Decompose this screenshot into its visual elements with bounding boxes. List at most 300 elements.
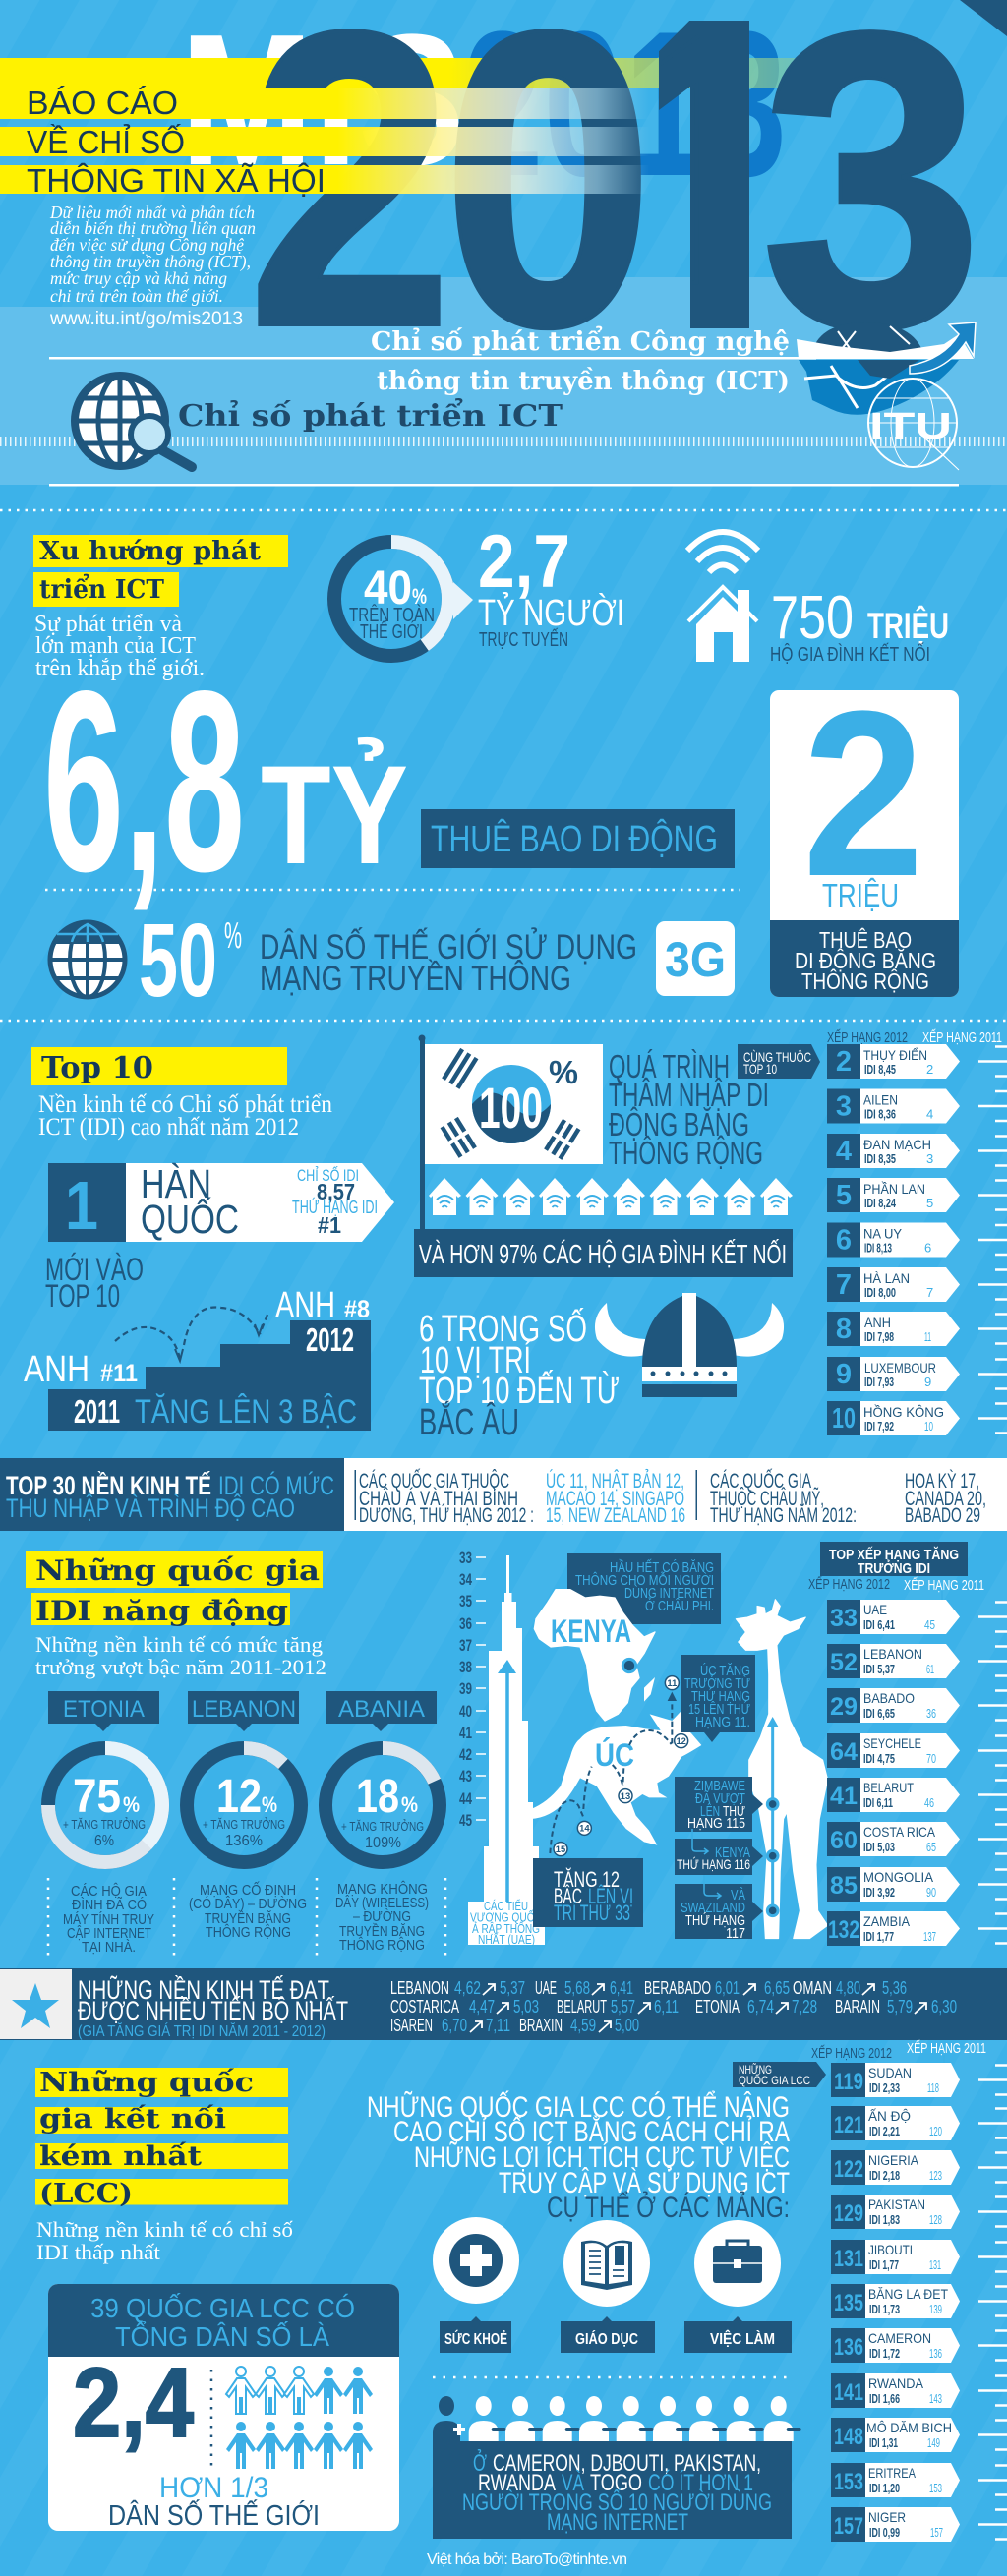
icon: work briefcase: [694, 2220, 781, 2307]
rank row: Mongolia: [827, 1867, 1007, 1902]
heading: least connected countries: kém nhất: [39, 2140, 203, 2172]
main title: [27, 85, 326, 199]
rank card: South Korea: 1: [65, 1167, 98, 1244]
banner: top 30 economies: [0, 1458, 1007, 1531]
callout: bandwidth in Africa: [567, 1553, 721, 1624]
stat: 50 percent: %: [224, 915, 242, 957]
stat: 2.7 billion online: [478, 520, 624, 651]
rank row: Sudan: SUDAN: [868, 2065, 912, 2080]
rank row: India: 120: [929, 2124, 942, 2138]
rank row: Rwanda: RWANDA: [868, 2375, 924, 2391]
rank row: Pakistan: [831, 2195, 1007, 2229]
donut chart: Lebanon 12 percent: + TĂNG TRƯỞNG: [203, 1817, 285, 1832]
table headers: growth ranks: XẾP HẠNG 2012: [808, 1576, 890, 1593]
rank row: Mongolia: IDI 3,92: [863, 1885, 895, 1900]
callout: UAE rise: LÊN VỊ: [588, 1884, 633, 1908]
rank row: Sweden: THỤY ĐIỂN: [863, 1046, 927, 1063]
rank scale 33 to 45: 42: [459, 1745, 472, 1764]
label: jobs: VIỆC LÀM: [710, 2329, 775, 2348]
tag: LCC countries: [733, 2062, 826, 2087]
ICT development subtitle: Chỉ số phát triển Công nghệ: [371, 325, 790, 357]
banner: most improved economies: UAE: [535, 1978, 557, 1998]
rank row: Zambia: ZAMBIA: [863, 1913, 911, 1929]
callout: Swaziland: THỨ HẠNG: [685, 1912, 745, 1929]
rank row: Mozambique: [831, 2418, 1007, 2452]
intro paragraph: đến việc sử dụng Công nghệ: [50, 235, 245, 255]
heading: dynamic IDI countries: Những quốc gia: [35, 1554, 320, 1587]
map: Africa with Kenya: [534, 1590, 655, 1721]
heading: least connected countries: Những quốc: [39, 2067, 254, 2098]
label: UAE: NHẤT (UAE): [478, 1932, 535, 1947]
rank row: Djibouti: 131: [929, 2257, 941, 2272]
callout: Zimbabwe: ZIMBAWE: [694, 1778, 745, 1794]
rank row: Nigeria: NIGERIA: [868, 2152, 919, 2168]
text: LCC benefits: TRUY CẬP VÀ SỬ DỤNG ICT: [499, 2166, 790, 2199]
map: Africa with Kenya: KENYA: [551, 1613, 631, 1649]
rank row: Nigeria: 122: [834, 2156, 863, 2183]
callout: least connected facts: VÀ: [562, 2470, 584, 2496]
rank row: Barbados: [827, 1688, 1007, 1723]
main title: BÁO CÁO: [27, 85, 178, 121]
kangaroo: Australia rank path: 15: [556, 1844, 565, 1854]
rank row: Finland: [827, 1178, 1007, 1212]
banner: top 30 economies: THUỘC CHÂU MỸ,: [710, 1487, 824, 1510]
rank row: UAE: 33: [830, 1605, 858, 1632]
callout: UAE rise: TRÍ THỨ 33: [554, 1901, 630, 1925]
rank row: Lebanon: [827, 1644, 1007, 1678]
text: Estonia description: [63, 1883, 154, 1956]
donut chart: Albania 18 percent: + TĂNG TRƯỞNG: [341, 1819, 424, 1834]
heading: ICT trends: [33, 535, 288, 607]
rank row: United Kingdom: [827, 1312, 1007, 1346]
rank row: Lebanon: LEBANON: [863, 1646, 922, 1662]
flag: South Korea: [419, 1034, 603, 1229]
rank row: Mozambique: MÔ DĂM BICH: [866, 2420, 952, 2435]
text: Estonia description: ĐÌNH ĐÃ CÓ: [72, 1897, 147, 1913]
callout: least connected facts: TOGO: [590, 2470, 642, 2496]
banner: most improved economies: 6,41: [610, 1978, 633, 1998]
rank row: Pakistan: 128: [929, 2212, 942, 2227]
rank row: Norway: IDI 8,13: [864, 1241, 892, 1255]
rank row: Pakistan: PAKISTAN: [868, 2196, 925, 2212]
tag: also in top 10: CÙNG THUỘC: [743, 1049, 811, 1065]
yellow band top: [0, 58, 816, 88]
top 10 paragraph: [38, 1091, 332, 1141]
rank row: Sudan: 118: [927, 2080, 939, 2095]
rank row: Bangladesh: 135: [834, 2290, 863, 2316]
top right dark corner: [960, 0, 1007, 36]
card: 2 million broadband: [770, 662, 959, 997]
rank scale 33 to 45: 39: [459, 1679, 472, 1698]
text: broadband penetration: [609, 1048, 769, 1171]
rank row: Seychelles: IDI 4,75: [863, 1751, 895, 1766]
banner: 97 percent households: [414, 1229, 793, 1277]
text: LCC benefits: NHỮNG QUỐC GIA LCC CÓ THỂ NÂNG: [367, 2090, 790, 2124]
kangaroo: Australia rank path: 11: [667, 1678, 677, 1688]
country tag: Albania: ABANIA: [338, 1696, 425, 1723]
text: Nordic countries: TOP 10 ĐẾN TỪ: [419, 1369, 620, 1412]
callout: UAE rise: BẬC: [554, 1884, 582, 1908]
rank row: Seychelles: 64: [830, 1738, 858, 1766]
table headers: LCC ranks: XẾP HẠNG 2012: [811, 2045, 892, 2062]
stat: 750 million households: [770, 584, 949, 666]
banner: most improved economies: 6,70: [442, 2016, 467, 2035]
heading: ICT trends: triển ICT: [39, 573, 165, 605]
rank scale 33 to 45: 40: [459, 1702, 472, 1721]
rank scale 33 to 45: 33: [459, 1549, 472, 1567]
kangaroo: Australia rank path: [531, 1676, 701, 1856]
website url: www.itu.int/go/mis2013: [49, 309, 243, 329]
rank row: Mongolia: MONGOLIA: [863, 1869, 934, 1885]
top 10 paragraph: Nền kinh tế có Chỉ số phát triển: [38, 1091, 332, 1118]
rank row: Pakistan: IDI 1,83: [869, 2212, 900, 2227]
rank row: Norway: 6: [836, 1225, 852, 1257]
callout: Swaziland: [675, 1875, 763, 1942]
label: UAE: VƯƠNG QUỐC: [470, 1909, 542, 1925]
stairs: UK rank climb: ANH: [275, 1285, 335, 1326]
rank row: Denmark: [827, 1134, 1007, 1168]
rank row: India: [831, 2106, 1007, 2140]
rank row: Djibouti: IDI 1,77: [869, 2257, 899, 2272]
country tag: Estonia: [48, 1691, 159, 1731]
dynamic countries paragraph: [35, 1632, 326, 1679]
stairs: UK rank climb: TĂNG LÊN 3 BẬC: [135, 1393, 357, 1431]
rank card: South Korea: THỨ HẠNG IDI: [292, 1197, 378, 1217]
rank row: UAE: UAE: [863, 1602, 887, 1617]
rank row: India: ẤN ĐỘ: [868, 2108, 911, 2124]
rank row: Mongolia: 85: [830, 1872, 858, 1900]
label: mobile subscriptions: THUÊ BAO DI ĐỘNG: [431, 817, 718, 860]
callout: Australia growth: HẠNG 11.: [695, 1715, 750, 1730]
background word MIS: MIS: [180, 0, 465, 205]
rank row: Ireland: AILEN: [863, 1091, 898, 1107]
text: Estonia description: MÁY TÍNH TRUY: [63, 1911, 154, 1928]
donut chart: Albania 18 percent: 109%: [365, 1835, 401, 1851]
heading: least connected countries: [35, 2067, 288, 2209]
stat: 6.8 billion: 6,8: [43, 637, 245, 925]
section heading: ICT index: Chỉ số phát triển ICT: [178, 397, 563, 434]
icon: health: [433, 2217, 519, 2304]
ICT development subtitle: thông tin truyền thông (ICT): [377, 367, 790, 396]
text: broadband penetration: THÂM NHẬP DI: [609, 1077, 769, 1113]
rank row: Ireland: [827, 1089, 1007, 1123]
banner: top 30 economies: CÁC QUỐC GIA THUỘC: [359, 1469, 509, 1493]
rank row: Luxembourg: LUXEMBOUR: [864, 1360, 936, 1376]
icon: ITU logo: [797, 322, 976, 470]
text: Lebanon description: TRUYỀN BĂNG: [205, 1910, 291, 1927]
donut chart: Lebanon 12 percent: %: [262, 1792, 277, 1817]
donut chart: 40 percent: THẾ GIỚI: [360, 620, 423, 643]
banner: most improved economies: NHỮNG NỀN KINH TẾ ĐẠT: [78, 1974, 329, 2005]
card: LCC population: TỔNG DÂN SỐ LÀ: [115, 2320, 329, 2352]
houses row: [429, 1178, 793, 1215]
yellow fading title bands: [0, 88, 649, 194]
rank scale 33 to 45: 43: [459, 1767, 472, 1786]
kangaroo: Australia rank path: 13: [621, 1791, 630, 1801]
rank row: Barbados: 29: [830, 1693, 858, 1721]
donut chart: Albania 18 percent: %: [401, 1792, 418, 1817]
card: LCC population: DÂN SỐ THẾ GIỚI: [108, 2498, 320, 2532]
banner: most improved economies: BRAXIN: [519, 2016, 563, 2035]
stairs: UK rank climb: 2012: [306, 1321, 354, 1358]
rank row: Belarus: [827, 1778, 1007, 1812]
card: LCC population: 2,4: [73, 2348, 194, 2458]
heading: top IDI growth: TOP XẾP HẠNG TĂNG: [829, 1547, 959, 1563]
rank row: Costa Rica: 65: [926, 1840, 936, 1854]
rank row: Djibouti: JIBOUTI: [868, 2242, 913, 2257]
icon: viking helmet: [595, 1293, 784, 1397]
rank row: Finland: PHẦN LAN: [863, 1181, 925, 1197]
rank scale 33 to 45: 44: [459, 1789, 472, 1808]
dotted dividers: [0, 510, 1007, 1021]
rank scale 33 to 45: 41: [459, 1724, 472, 1742]
text: LCC benefits: [367, 2090, 790, 2224]
rank row: Niger: NIGER: [868, 2509, 906, 2525]
icon: globe: [50, 921, 125, 997]
country tag: Albania: [326, 1691, 437, 1731]
rank row: Finland: 5: [926, 1196, 933, 1210]
stat: 50 percent: 50: [139, 903, 217, 1019]
rank row: Denmark: 4: [836, 1136, 852, 1167]
rank row: Pakistan: 129: [834, 2200, 863, 2227]
giraffe with rank arrow: [736, 1600, 828, 1939]
kangaroo: Australia rank path: 14: [579, 1824, 590, 1834]
rank row: Costa Rica: COSTA RICA: [863, 1824, 936, 1840]
rank row: Rwanda: 143: [929, 2391, 942, 2406]
rank row: Denmark: IDI 8,35: [864, 1151, 896, 1166]
rank row: Niger: [831, 2507, 1007, 2542]
heading: dynamic IDI countries: [26, 1551, 323, 1627]
rank row: Eritrea: ERITREA: [868, 2465, 917, 2481]
text: Albania description: MẠNG KHÔNG: [337, 1881, 428, 1898]
banner: most improved economies: 7,11: [486, 2016, 510, 2035]
rank row: Norway: NA UY: [863, 1225, 903, 1241]
callout: least connected facts: RWANDA: [478, 2470, 556, 2496]
stairs: UK rank climb: [24, 1285, 371, 1431]
rank row: Bangladesh: [831, 2284, 1007, 2318]
banner: most improved economies: 6,65: [764, 1978, 790, 1998]
rank row: Lebanon: 61: [926, 1662, 934, 1676]
rank scale 33 to 45: 34: [459, 1570, 472, 1589]
banner: most improved economies: 6,01: [715, 1978, 740, 1998]
text: new to top 10: [45, 1252, 144, 1314]
rank row: Seychelles: 70: [926, 1751, 936, 1766]
donut chart: Estonia 75 percent: 75: [73, 1771, 121, 1823]
rank row: UAE: 45: [924, 1617, 935, 1632]
callout: least connected facts: MẠNG INTERNET: [547, 2509, 688, 2536]
banner: most improved economies: 4,62: [454, 1978, 481, 1998]
donut chart: Lebanon 12 percent: [187, 1748, 301, 1862]
callout: Swaziland: VÀ: [731, 1887, 745, 1903]
card: LCC population: HƠN 1/3: [159, 2472, 268, 2504]
banner: most improved economies: BERABADO: [644, 1978, 711, 1998]
text: broadband penetration: ĐỘNG BĂNG: [609, 1106, 749, 1142]
rank row: Zambia: 132: [828, 1916, 859, 1944]
rank row: Netherlands: IDI 8,00: [864, 1285, 896, 1300]
rank row: Zambia: [827, 1911, 1007, 1946]
stat: 2.7 billion online: 2,7: [478, 520, 570, 604]
rank row: Nigeria: IDI 2,18: [869, 2168, 900, 2183]
text: Estonia description: CẬP INTERNET: [67, 1925, 151, 1942]
rank row: Finland: IDI 8,24: [864, 1196, 897, 1210]
rank row: Seychelles: [827, 1733, 1007, 1768]
heading: top 10: Top 10: [41, 1051, 153, 1085]
rank row: Mongolia: 90: [926, 1885, 936, 1900]
callout: Swaziland: SWAZILAND: [681, 1900, 745, 1916]
rank row: Cameroon: 136: [834, 2334, 863, 2361]
card: 2 million broadband: 2: [802, 662, 924, 925]
top 10 paragraph: ICT (IDI) cao nhất năm 2012: [38, 1114, 299, 1141]
donut chart: Estonia 75 percent: + TĂNG TRƯỞNG: [63, 1817, 146, 1832]
rank row: Sweden: 2: [836, 1046, 852, 1078]
text: Lebanon description: [189, 1881, 307, 1941]
card: LCC population: [48, 2284, 399, 2532]
rank row: Belarus: BELARUT: [863, 1780, 914, 1795]
rank row: Hong Kong: IDI 7,92: [864, 1419, 894, 1434]
banner: most improved economies: (GIA TĂNG GIÁ TRỊ IDI NĂM 2011 - 2012): [78, 2021, 326, 2040]
rank card: South Korea: [48, 1161, 394, 1244]
heading: least connected countries: (LCC): [39, 2179, 133, 2209]
stairs: UK rank climb: ANH: [24, 1349, 89, 1390]
tag: LCC countries: QUỐC GIA LCC: [739, 2073, 810, 2087]
callout: bandwidth in Africa: Ở CHÂU PHI.: [645, 1597, 714, 1614]
banner: most improved economies: 5,00: [615, 2016, 639, 2035]
banner: most improved economies: BARAIN: [835, 1997, 880, 2017]
rank row: Norway: [827, 1223, 1007, 1257]
rank row: Netherlands: 7: [926, 1285, 933, 1300]
callout: least connected facts: CÓ ÍT HƠN 1: [648, 2470, 753, 2496]
rank row: Netherlands: HÀ LAN: [863, 1270, 910, 1286]
heading: top 10: [31, 1047, 287, 1085]
rank row: Netherlands: 7: [836, 1269, 852, 1301]
rank row: Netherlands: [827, 1267, 1007, 1302]
icon: wifi house: [687, 532, 758, 662]
banner: most improved economies: BELARUT: [557, 1997, 607, 2017]
icon: ITU logo: ITU: [869, 406, 952, 447]
main title: THÔNG TIN XÃ HỘI: [27, 162, 326, 199]
heading: least connected countries: gia kết nối: [39, 2103, 226, 2135]
rank card: South Korea: CHỈ SỐ IDI: [297, 1165, 359, 1185]
rank row: Denmark: 3: [926, 1151, 933, 1166]
donut chart: 40 percent: [334, 542, 473, 656]
rank row: Sudan: IDI 2,33: [869, 2080, 900, 2095]
text: Estonia description: TẠI NHÀ.: [82, 1939, 136, 1956]
text: Lebanon description: MẠNG CỐ ĐỊNH: [200, 1881, 296, 1899]
rank row: Rwanda: 141: [834, 2379, 863, 2406]
rank row: Cameroon: CAMERON: [868, 2330, 931, 2346]
rank row: Sweden: IDI 8,45: [864, 1062, 896, 1077]
rank row: Lebanon: IDI 5,37: [863, 1662, 895, 1676]
rank row: Zambia: IDI 1,77: [863, 1929, 894, 1944]
banner: most improved economies: 5,68: [564, 1978, 590, 1998]
icon: 3G: [656, 921, 735, 996]
tower: UAE skyscraper: [484, 1555, 539, 1942]
stairs: UK rank climb: 2011: [74, 1393, 120, 1430]
LCC paragraph: IDI thấp nhất: [36, 2240, 160, 2264]
rank row: Hong Kong: HỒNG KÔNG: [863, 1403, 944, 1420]
text: LCC benefits: CỤ THỂ Ở CÁC MẢNG:: [547, 2191, 790, 2224]
callout: Australia growth: THỨ HẠNG: [691, 1688, 750, 1705]
rank row: India: 121: [834, 2112, 863, 2138]
label: UAE: CÁC TIỂU: [484, 1899, 528, 1913]
rank card: South Korea: #1: [318, 1212, 341, 1238]
rank row: Mozambique: 149: [927, 2435, 940, 2450]
flag: South Korea: %: [549, 1054, 578, 1090]
rank scale 33 to 45: 45: [459, 1811, 472, 1830]
donut chart: 40 percent: %: [412, 584, 427, 609]
stat: 750 million households: 750: [771, 584, 854, 652]
banner: most improved economies: 5,57: [611, 1997, 635, 2017]
rank row: Mozambique: 148: [834, 2424, 863, 2450]
rank scale 33 to 45: 35: [459, 1592, 472, 1610]
banner: top 30 economies: CÁC QUỐC GIA: [710, 1469, 811, 1493]
text: Estonia description: CÁC HỘ GIA: [71, 1883, 147, 1900]
tag: also in top 10: [738, 1044, 820, 1079]
callout: Zimbabwe: ĐÃ VƯỢT: [695, 1790, 745, 1807]
callout: Zimbabwe: LÊN: [700, 1803, 720, 1820]
donut chart: Lebanon 12 percent: 12: [216, 1771, 262, 1823]
rank row: Luxembourg: 9: [924, 1375, 931, 1389]
callout: least connected facts: NGƯỜI TRONG SỐ 10 NGƯỜI DÙNG: [462, 2488, 772, 2516]
banner: top 30 economies: CHÂU Á VÀ THÁI BÌNH: [359, 1488, 518, 1510]
rank row: Bangladesh: IDI 1,73: [869, 2302, 900, 2316]
banner: most improved economies: ĐƯỢC NHIỀU TIẾN BỘ NHẤT: [78, 1995, 348, 2025]
rank card: South Korea: QUỐC: [141, 1197, 239, 1242]
callout: Australia growth: 15 LÊN THỨ: [688, 1701, 750, 1718]
callout: bandwidth in Africa: THÔNG CHO MỖI NGƯỜI: [575, 1571, 714, 1589]
header lines and ruler: [0, 357, 1007, 486]
rank row: Cameroon: IDI 1,72: [869, 2346, 900, 2361]
trends paragraph: lớn mạnh của ICT: [35, 633, 196, 659]
rank row: Zambia: 137: [923, 1929, 936, 1944]
country tag: Estonia: ETONIA: [63, 1696, 145, 1723]
stat: 2.7 billion online: TỶ NGƯỜI: [478, 591, 624, 634]
credit line: Việt hóa bởi: BaroTo@tinhte.vn: [427, 2551, 627, 2568]
rank row: United Kingdom: 11: [924, 1329, 931, 1344]
callout: UAE rise: [533, 1858, 643, 1927]
text: Nordic countries: BẮC ÂU: [419, 1400, 519, 1443]
rank row: Luxembourg: [827, 1357, 1007, 1391]
label: health: [440, 2316, 511, 2353]
text: Nordic countries: [419, 1306, 620, 1443]
heading: dynamic IDI countries: IDI năng động: [35, 1595, 288, 1627]
rank row: Niger: 157: [834, 2513, 863, 2540]
main title: VỀ CHỈ SỐ: [27, 123, 185, 160]
rank row: Denmark: ĐAN MẠCH: [863, 1137, 931, 1152]
text: broadband penetration: QUÁ TRÌNH: [609, 1048, 730, 1084]
rank row: Ireland: 4: [926, 1107, 933, 1121]
callout: bandwidth in Africa: DÙNG INTERNET: [624, 1585, 714, 1602]
label: mobile subscriptions: [421, 809, 735, 868]
banner: most improved economies: ISAREN: [390, 2016, 433, 2035]
banner: most improved economies: 5,79: [887, 1997, 913, 2017]
donut chart: Estonia 75 percent: %: [123, 1792, 140, 1817]
rank row: Ireland: IDI 8,36: [864, 1107, 896, 1121]
rank row: Cameroon: [831, 2328, 1007, 2363]
text: population on mobile network: DÂN SỐ THẾ GIỚI SỬ DỤNG: [260, 927, 637, 966]
label: health: SỨC KHOẺ: [444, 2329, 507, 2348]
tag: also in top 10: TOP 10: [743, 1061, 777, 1077]
callout: Zimbabwe: [675, 1777, 763, 1832]
text: Albania description: [335, 1881, 429, 1954]
donut chart: Lebanon 12 percent: 136%: [225, 1833, 263, 1849]
rank row: Hong Kong: 10: [832, 1403, 856, 1434]
rank row: Niger: 157: [930, 2525, 943, 2540]
banner: top 30 economies: TOP 30 NỀN KINH TẾ: [6, 1470, 211, 1500]
text: broadband penetration: THÔNG RỘNG: [609, 1135, 763, 1171]
donut chart: 40 percent: TRÊN TOÀN: [349, 604, 435, 626]
rank row: UAE: [827, 1600, 1007, 1634]
